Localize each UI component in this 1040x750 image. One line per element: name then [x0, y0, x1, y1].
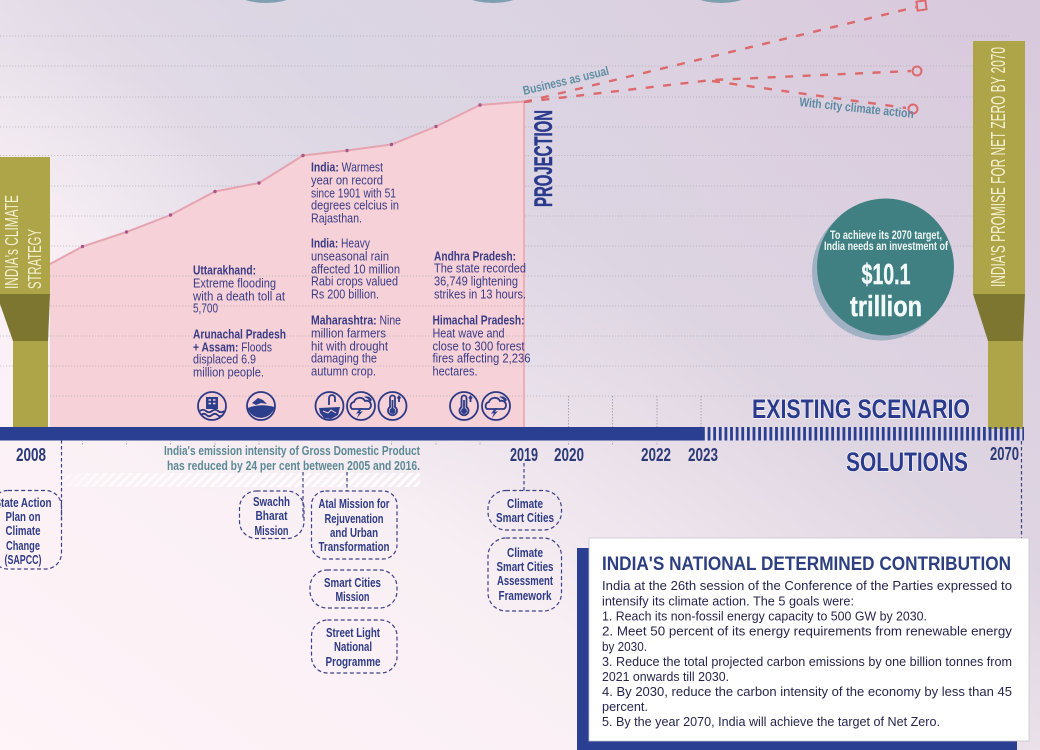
event text: Andhra Pradesh and Himachal Pradesh: Himachal Pradesh: [432, 312, 524, 327]
panel body text: 5. By the year 2070, India will achieve the target of Net Zero. [602, 715, 940, 729]
solution: Climate Smart Cities [488, 490, 562, 530]
year labels: 2019 [510, 445, 538, 465]
panel: national determined contribution [577, 538, 1029, 750]
event text: Uttarakhand, Arunachal Pradesh and Assam: million people. [193, 364, 264, 379]
event text: Andhra Pradesh and Himachal Pradesh: 36,749 lightening [434, 273, 518, 288]
panel body text: percent. [602, 700, 648, 714]
left pillar: India's climate strategy: STRATEGY [25, 229, 45, 289]
solution: Climate Smart Cities Assessment Framework: Framework [498, 589, 552, 603]
solution: SAPCC: Change [6, 539, 40, 553]
solution: Swachh Bharat Mission: Mission [254, 524, 288, 538]
event text: India and Maharashtra: India: Heavy [311, 235, 370, 250]
event text: India and Maharashtra: affected 10 million [311, 261, 400, 276]
label: business as usual: Business as usual [521, 64, 610, 98]
year labels [16, 444, 1019, 465]
heading: solutions: SOLUTIONS [846, 447, 968, 477]
event text: India and Maharashtra: autumn crop. [311, 363, 376, 378]
solution: Climate Smart Cities Assessment Framework: Smart Cities [496, 560, 554, 574]
panel body text: 3. Reduce the total projected carbon emissions by one billion tonnes from [602, 655, 1012, 669]
left pillar: India's climate strategy: INDIA's CLIMATE [2, 195, 22, 289]
icon: storm cloud [347, 392, 375, 420]
event text: India and Maharashtra: Rs 200 billion. [311, 286, 379, 301]
solution: Street Light National Programme: National [334, 640, 372, 654]
callout: emission intensity [164, 444, 421, 473]
callout: investment circle: To achieve its 2070 target, [830, 230, 942, 242]
callout: investment circle: India needs an investment of [824, 241, 948, 253]
label: projection: PROJECTION [530, 110, 558, 207]
event text: India and Maharashtra [311, 159, 401, 378]
solution: Smart Cities Mission [310, 570, 397, 608]
solution: Smart Cities Mission: Mission [336, 590, 370, 604]
solution: Swachh Bharat Mission [240, 491, 304, 538]
event text: Andhra Pradesh and Himachal Pradesh: Heat wave and [432, 325, 504, 340]
icon: flood water [247, 392, 275, 420]
event text: India and Maharashtra: Maharashtra: Nine [311, 312, 401, 327]
event text: Uttarakhand, Arunachal Pradesh and Assam: Uttarakhand: [193, 262, 256, 277]
event text: India and Maharashtra: Rajasthan. [311, 210, 362, 225]
solution: Atal Mission [312, 491, 397, 559]
event text: Uttarakhand, Arunachal Pradesh and Assam: Arunachal Pradesh [193, 326, 286, 341]
event text: Andhra Pradesh and Himachal Pradesh: close to 300 forest [432, 338, 525, 353]
solution: SAPCC: Climate [6, 524, 41, 538]
icon: drought [316, 392, 344, 420]
panel body text: 1. Reach its non-fossil energy capacity to 500 GW by 2030. [602, 610, 927, 624]
solution: Smart Cities Mission: Smart Cities [324, 576, 381, 590]
icon: storm cloud [482, 392, 510, 420]
solution: Climate Smart Cities: Smart Cities [496, 511, 554, 525]
event text: Uttarakhand, Arunachal Pradesh and Assam [192, 262, 286, 379]
event text: India and Maharashtra: Rabi crops valued [311, 273, 398, 288]
event text: India and Maharashtra: degrees celcius in [311, 197, 399, 212]
event text: Uttarakhand, Arunachal Pradesh and Assam: with a death toll at [192, 288, 285, 303]
callout: investment circle: $10.1 [862, 259, 910, 291]
event text: Uttarakhand, Arunachal Pradesh and Assam: Extreme flooding [193, 275, 276, 290]
year labels: 2020 [554, 445, 584, 465]
solution: Street Light National Programme: Street Light [326, 626, 381, 640]
solution: Street Light National Programme [312, 620, 397, 673]
event text: Andhra Pradesh and Himachal Pradesh: hectares. [432, 363, 478, 378]
callout: investment circle [812, 198, 954, 340]
year labels: 2008 [16, 445, 46, 465]
event text: Uttarakhand, Arunachal Pradesh and Assam: displaced 6.9 [193, 351, 256, 366]
timeline bar [0, 427, 1024, 440]
top partial circles [193, 0, 794, 3]
solution: SAPCC: (SAPCC) [4, 553, 42, 567]
solution: Climate Smart Cities Assessment Framework: Assessment [497, 574, 554, 588]
event text: Andhra Pradesh and Himachal Pradesh [432, 248, 530, 378]
label: with city climate action: With city climate action [799, 95, 915, 121]
panel body text [602, 579, 1013, 729]
panel body text: intensify its climate action. The 5 goals were: [602, 594, 854, 608]
panel body text: by 2030. [602, 640, 647, 654]
panel body text: 4. By 2030, reduce the carbon intensity of the economy by less than 45 [602, 685, 1012, 699]
event text: Uttarakhand, Arunachal Pradesh and Assam: 5,700 [193, 300, 218, 315]
solution: Swachh Bharat Mission: Bharat [256, 509, 288, 523]
event text: India and Maharashtra: India: Warmest [311, 159, 383, 174]
event text: Uttarakhand, Arunachal Pradesh and Assam: + Assam: Floods [193, 339, 272, 354]
event text: India and Maharashtra: hit with drought [311, 338, 388, 353]
panel body text: 2. Meet 50 percent of its energy requirements from renewable energy [602, 624, 1013, 638]
solution: Climate Smart Cities Assessment Framework: Climate [507, 546, 543, 560]
solution: Climate Smart Cities Assessment Framework [488, 538, 562, 611]
heading: existing scenario: EXISTING SCENARIO [752, 394, 970, 424]
event text: Andhra Pradesh and Himachal Pradesh: strikes in 13 hours. [434, 286, 526, 301]
year labels: 2023 [688, 445, 718, 465]
solution: SAPCC: Plan on [6, 510, 40, 524]
solution: Atal Mission: Rejuvenation [324, 512, 384, 526]
solution: Atal Mission: Atal Mission for [318, 497, 390, 511]
callout: emission intensity: has reduced by 24 per cent between 2005 and 2016. [167, 459, 420, 473]
solution: Climate Smart Cities: Climate [507, 497, 543, 511]
solution: Swachh Bharat Mission: Swachh [253, 495, 290, 509]
event text: Andhra Pradesh and Himachal Pradesh: fires affecting 2,236 [432, 350, 530, 365]
icon: thermometer [450, 392, 478, 420]
solution: Atal Mission: Transformation [318, 540, 390, 554]
stripe band [60, 473, 420, 487]
event text: Andhra Pradesh and Himachal Pradesh: The state recorded [434, 260, 526, 275]
icon: thermometer [378, 392, 406, 420]
solution: SAPCC [0, 490, 62, 569]
right pillar: net zero promise [973, 41, 1025, 429]
event text: India and Maharashtra: year on record [311, 172, 383, 187]
solution: Street Light National Programme: Programme [326, 655, 381, 669]
left pillar: India's climate strategy [0, 157, 50, 428]
event text: Andhra Pradesh and Himachal Pradesh: Andhra Pradesh: [434, 248, 516, 263]
year labels: 2022 [641, 445, 671, 465]
year labels: 2070 [990, 444, 1019, 464]
event text: India and Maharashtra: unseasonal rain [311, 248, 389, 263]
event text: India and Maharashtra: damaging the [311, 350, 377, 365]
panel body text: India at the 26th session of the Conference of the Parties expressed to [602, 579, 1012, 593]
callout: investment circle: trillion [850, 291, 922, 323]
projection dashed lines [524, 0, 927, 114]
callout: emission intensity: India's emission intensity of Gross Domestic Product [164, 444, 421, 458]
area chart: emissions to 2019 [50, 102, 524, 427]
event text: India and Maharashtra: million farmers [311, 325, 386, 340]
icon: flooded building [198, 392, 226, 420]
solution: Atal Mission: and Urban [330, 526, 378, 540]
event text: India and Maharashtra: since 1901 with 51 [311, 185, 396, 200]
panel body text: 2021 onwards till 2030. [602, 670, 729, 684]
